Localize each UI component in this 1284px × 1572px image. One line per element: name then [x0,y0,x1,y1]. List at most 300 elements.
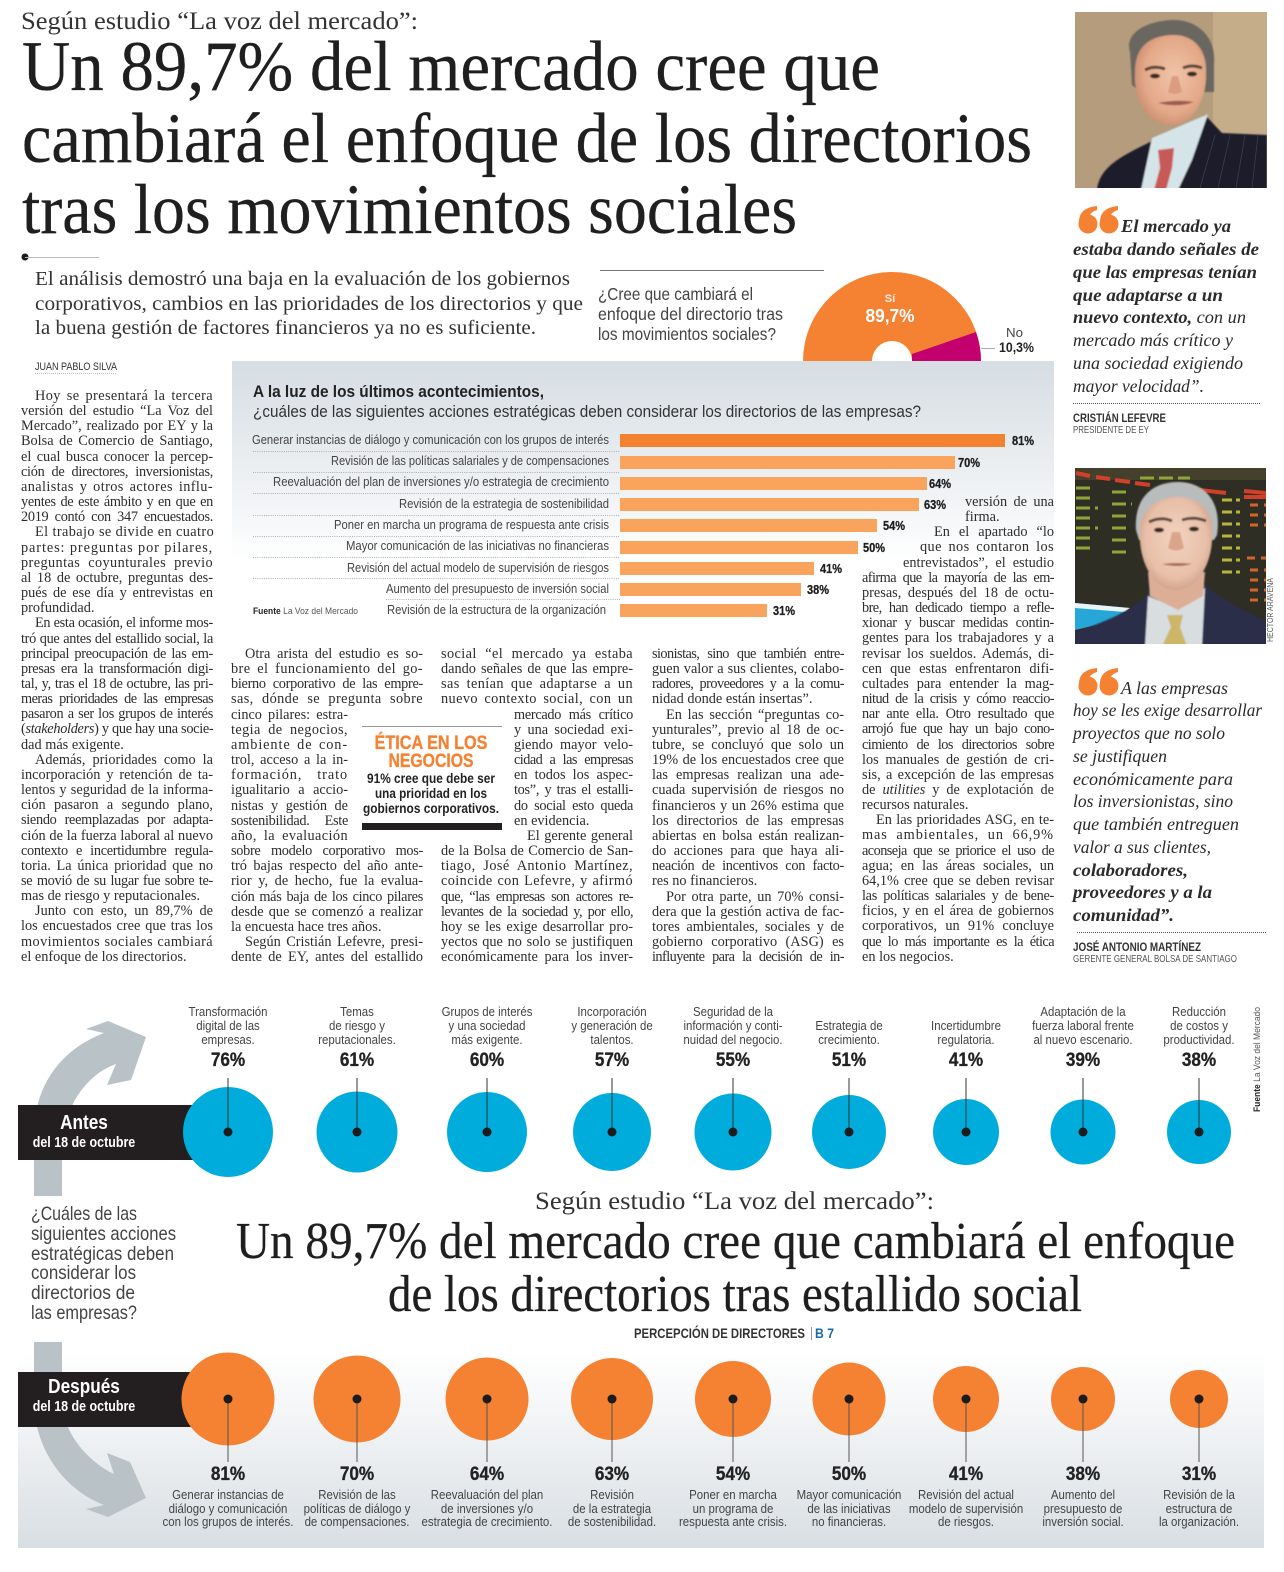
quote attribution [1073,412,1166,436]
after item 38%: inversión social. [1042,1514,1124,1529]
after item 50%: 50% [832,1462,866,1484]
article column 5: agua; en las áreas sociales, un [862,858,1054,874]
article column 1: Bolsa de Comercio de Santiago, [21,433,213,449]
quote text: mayor velocidad”. [1073,376,1204,396]
article column 2: trol, acceso a la in- [231,752,348,768]
ethics callout box: NEGOCIOS [388,751,474,772]
before item 51%: crecimiento. [818,1032,880,1047]
article column 2: formación, trato [231,767,348,783]
article column 1: pasaron a ser los grupos de interés [21,706,213,722]
before item 61%: 61% [340,1048,374,1070]
main headline [22,28,1032,249]
chart values: 31% [773,604,795,618]
before item 38% [1163,1004,1235,1164]
chart values: 54% [883,519,905,533]
article column 5: cimiento de los directorios sobre [862,736,1054,752]
teaser headline [236,1188,1235,1323]
article column 2: tegia de negocios, [231,722,348,738]
article column 3: dando señales de que las empre- [441,661,633,677]
poll half donut chart: Sí [885,293,896,305]
label: after: del 18 de octubre [33,1398,136,1414]
poll question: enfoque del directorio tras [598,304,783,324]
quote text: proyectos que no solo [1071,723,1225,743]
quote text [1071,678,1263,925]
article column 1: pués de ese día y entrevistas en [21,585,213,601]
article column 5: gentes para los trabajadores y a [862,630,1054,646]
before item 41%: regulatoria. [937,1032,995,1047]
article column 2: cinco pilares: estra- [231,707,348,723]
after item 50%: Mayor comunicación [797,1487,902,1502]
article column 1: el enfoque de los directorios. [21,949,187,965]
article column 5: los manuales de gestión de cri- [862,752,1054,768]
after: row of orange circles [163,1352,1239,1529]
after item 31%: estructura de [1166,1501,1233,1516]
quote text: nuevo contexto, con un [1073,307,1246,327]
article column 4: financieros y un 26% estima que [652,798,844,814]
article column 1: mas de riesgo y reputacionales. [21,888,200,904]
after item 70% [304,1356,411,1529]
chart heading [253,382,921,421]
quote text: colaboradores, [1073,860,1188,880]
before item 55%: 55% [716,1048,750,1070]
chart values: 64% [929,477,951,491]
article column 5: nitud de la crisis y cómo reaccio- [862,691,1054,707]
before item 39%: al nuevo escenario. [1033,1032,1133,1047]
label: before: del 18 de octubre [33,1134,136,1150]
article column 2: bierno corporativo de las empre- [231,676,423,692]
label: after: Después [48,1375,120,1397]
article column 1: movimientos sociales cambiará [21,934,213,950]
quote attribution: PRESIDENTE DE EY [1073,424,1149,436]
article column 2: nistas y gestión de [231,798,348,814]
article column 2: sas, dónde se pregunta sobre [231,691,423,707]
article column 3: mercado más crítico [514,707,633,723]
article column 2: desde que se comenzó a realizar [231,904,423,920]
after item 81% [163,1352,293,1529]
after item 64%: 64% [470,1462,504,1484]
article column 1: contexto e incertidumbre regula- [21,843,213,859]
before item 61%: Temas [340,1004,374,1019]
article column 1: el cual busca conocer la percep- [21,449,213,465]
article column 1: El trabajo se divide en cuatro [35,524,214,540]
ethics callout box: 91% cree que debe ser [367,771,496,786]
before item 60%: 60% [470,1048,504,1070]
intro text: la buena gestión de factores financieros ya no es suficiente. [35,317,536,339]
after item 54% [679,1361,787,1529]
quote 2 [1071,668,1266,965]
article column 4: nidad donde están insertas”. [652,691,812,707]
question: considerar los [31,1262,136,1284]
poll half donut chart: 89,7% [866,306,914,326]
before item 51%: 51% [832,1048,866,1070]
article column 5: aconseja que se priorice el uso de [862,843,1054,859]
chart heading: A la luz de los últimos acontecimientos, [253,382,544,401]
article column 4: gobierno corporativo (ASG) es [652,934,844,950]
article column 5: recursos naturales. [862,797,968,813]
quote text: una sociedad exigiendo [1073,353,1243,373]
article column 3: social “el mercado ya estaba [441,646,633,662]
chart bars [620,434,1005,617]
article column 2: rior y, de hecho, fue la evalua- [231,873,423,889]
article column 4: los directorios de las empresas [652,813,844,829]
poll question: los movimientos sociales? [598,324,776,344]
quote text: valor a sus clientes, [1073,837,1211,857]
article column 5: xionar y buscar medidas contin- [862,615,1054,631]
after item 38%: Aumento del [1051,1487,1115,1502]
after item 50%: de las iniciativas [807,1501,891,1516]
article column 4: las empresas realizan una ade- [652,767,844,783]
article column 2: sostenibilidad. Este [231,813,348,829]
article column 5: que lo más importante es la ética [862,934,1054,950]
after item 41%: Revisión del actual [918,1487,1014,1502]
article column 2: la encuesta hace tres años. [231,919,381,935]
before item 51%: Estrategia de [815,1018,883,1033]
article column 1: tró que antes del estallido social, la [21,630,213,646]
main headline: cambiará el enfoque de los directorios [22,100,1032,178]
article column 1: los encuestados cree que tras los [21,918,213,934]
before item 55%: información y conti- [683,1018,783,1033]
article column 1: meras prioridades de las empresas [21,691,213,707]
quote text: hoy se les exige desarrollar [1073,700,1263,720]
article column 1: Además, prioridades como la [35,752,213,768]
panel: strategic actions bar chart [232,361,1054,643]
after item 63%: de la estrategia [573,1501,651,1516]
chart heading: ¿cuáles de las siguientes acciones estratégicas deben considerar los directorios de las empresas? [253,402,921,421]
after item 70%: políticas de diálogo y [304,1501,411,1516]
article column 1: ción de la fuerza laboral al nuevo [21,828,213,844]
before source: Fuente La Voz del Mercado [1252,1007,1262,1112]
quote text: estaba dando señales de [1073,239,1259,259]
article column 5: bre, han dedicado tiempo a refle- [862,600,1054,616]
question: directorios de [31,1282,135,1304]
article column 1: analistas y otros actores influ- [21,479,213,495]
article column 4: tores ambientales, sociales y de [652,919,844,935]
before item 57%: Incorporación [577,1004,647,1019]
after item 70%: de compensaciones. [305,1514,409,1529]
after item 54%: Poner en marcha [689,1487,777,1502]
after item 31%: 31% [1182,1462,1216,1484]
photo credit: HECTOR ARAVENA [1266,577,1275,642]
label: before [18,1105,193,1160]
before item 55%: Seguridad de la [693,1004,773,1019]
after item 50%: no financieras. [812,1514,886,1529]
ethics callout box: gobiernos corporativos. [363,801,499,816]
after item 38%: presupuesto de [1044,1501,1123,1516]
before item 76%: 76% [211,1048,245,1070]
article column 1: presas era la transformación digi- [21,661,213,677]
article column 5: sis, a excepción de las empresas [862,767,1054,783]
article column 1: preguntas coyunturales previo [21,555,213,571]
quote attribution: GERENTE GENERAL BOLSA DE SANTIAGO [1073,953,1237,965]
article column 4: guen valor a sus clientes, colabo- [652,661,844,677]
article column 2: año, la evaluación [231,828,348,844]
ethics callout box [362,726,502,830]
quote text: se justifiquen [1073,746,1167,766]
before item 76%: digital de las [196,1018,260,1033]
quote 1 [1073,206,1260,436]
article column 1: Junto con esto, un 89,7% de [35,903,213,919]
article column 4: 19% de los encuestados cree que [652,752,844,768]
photo: Cristián Lefevre [1075,12,1267,190]
quote text: que las empresas tenían [1073,262,1257,282]
byline: JUAN PABLO SILVA [35,361,118,373]
article column 3: do social esto queda [514,798,633,814]
article column 5: corporativos, un 91% concluye [862,918,1054,934]
quote text: mercado más crítico y [1073,330,1233,350]
main headline: Un 89,7% del mercado cree que [22,28,880,106]
teaser headline: Según estudio “La voz del mercado”: [535,1188,934,1215]
article column 4: sionistas, sino que también entre- [652,646,844,662]
chart values: 41% [820,562,842,576]
before item 76%: empresas. [201,1032,255,1047]
article column 3: yectos que no solo se justifiquen [441,934,633,950]
quote text: comunidad”. [1073,905,1174,925]
after item 63%: de sostenibilidad. [568,1514,656,1529]
before: row of blue circles [183,1004,1235,1177]
chart row labels: Generar instancias de diálogo y comunicación con los grupos de interés [252,432,609,447]
chart values: 50% [863,541,885,555]
before item 51% [812,1018,886,1169]
photo: José Antonio Martínez [1075,468,1266,646]
question: ¿Cuáles de las [31,1203,137,1225]
article column 5: 64,1% cree que se deben revisar [862,873,1054,889]
article column 1: yentes de este ámbito y en que en [21,494,213,510]
before item 39%: fuerza laboral frente [1032,1018,1134,1033]
chart row labels: Poner en marcha un programa de respuesta ante crisis [334,517,609,532]
article column 1: profundidad. [21,600,94,616]
arrow: before [34,1021,146,1196]
poll question: ¿Cree que cambiará el [598,284,753,304]
main headline: tras los movimientos sociales [22,171,797,249]
icon: orange quotation mark [1078,206,1118,234]
article column 4: yunturales”, previo al 18 de oc- [652,722,844,738]
article column 1: 2019 contó con 347 encuestados. [21,509,213,525]
article column 5: ficios, y en el área de gobiernos [862,903,1054,919]
article column 1: dad más exigente. [21,737,124,753]
before item 39%: 39% [1066,1048,1100,1070]
article column 3: que, “las empresas son actores re- [441,888,633,904]
article column 1: se movió de su lugar fue sobre te- [21,873,213,889]
poll half donut chart: No [1006,325,1023,340]
arrow: after [34,1342,146,1517]
after item 38% [1042,1367,1124,1529]
before item 57% [571,1004,653,1171]
article column 4: do acciones para que haya ali- [652,843,844,859]
article column 1: ción de directores, inversionistas, [21,464,213,480]
article column 2: bre el funcionamiento del go- [231,661,423,677]
chart values: 63% [924,498,946,512]
ethics callout box: ÉTICA EN LOS [374,732,488,754]
article column 2: Según Cristián Lefevre, presi- [245,934,423,950]
article column 1: En esta ocasión, el informe mos- [35,615,213,631]
article column 1: al 18 de octubre, preguntas des- [21,570,213,586]
article column 2: ambiente de con- [231,737,348,753]
article column 5: en los negocios. [862,949,954,965]
before item 41%: 41% [949,1048,983,1070]
after item 41%: modelo de supervisión [909,1501,1023,1516]
chart row labels: Revisión de las políticas salariales y de compensaciones [331,453,609,468]
after item 64% [422,1358,552,1529]
article column 5: revisar los sueldos. Además, di- [862,646,1054,662]
quote text: que adaptarse a un [1073,285,1223,305]
chart values [773,434,1034,618]
question: estratégicas deben [31,1243,174,1265]
intro text: corporativos, cambios en las prioridades de los directorios y que [35,293,583,315]
article column 5: afirma que la mayoría de las em- [862,570,1054,586]
article column 5: firma. [965,509,1000,525]
article column 1: principal preocupación de las em- [21,646,213,662]
after item 81%: 81% [211,1462,245,1484]
chart row labels [252,432,609,617]
after item 54%: un programa de [693,1501,774,1516]
quote text [1073,216,1259,396]
before item 38%: 38% [1182,1048,1216,1070]
after item 81%: Generar instancias de [172,1487,284,1502]
after item 31% [1159,1370,1239,1529]
before item 61% [316,1004,398,1172]
article column 3: hoy se les exige desarrollar pro- [441,919,633,935]
poll half donut chart: 10,3% [999,339,1034,355]
article column 3: económicamente para los inver- [441,949,633,965]
article column 3: nuevo contexto social, con un [441,691,633,707]
article column 2: dente de EY, antes del estallido [231,949,423,965]
article column 4: neación de incentivos con facto- [652,858,844,874]
chart row labels: Mayor comunicación de las iniciativas no financieras [346,538,609,553]
article column 3: en todos los aspec- [514,767,633,783]
article column 4: influyente para la decisión de in- [652,949,844,965]
after item 64%: de inversiones y/o [441,1501,533,1516]
panel: after background [18,1352,1264,1548]
before item 61%: de riesgo y [329,1018,386,1033]
quote text: A las empresas [1120,678,1228,698]
before item 41%: Incertidumbre [931,1018,1001,1033]
label: before: Antes [60,1111,108,1133]
quote attribution [1073,941,1237,965]
article column 3: giendo mayor velo- [514,737,633,753]
after item 54%: respuesta ante crisis. [679,1514,787,1529]
article column 3: en evidencia. [514,813,589,829]
article column 3: coincide con Lefevre, y afirmó [441,873,633,889]
article column 1: toria. La única prioridad que no [21,858,213,874]
before item 38%: productividad. [1163,1032,1235,1047]
before item 57%: 57% [595,1048,629,1070]
before item 60%: Grupos de interés [442,1004,532,1019]
article column 3: sas tenían que adaptarse a un [441,676,633,692]
after item 63%: Revisión [590,1487,634,1502]
quote text: económicamente para [1073,769,1233,789]
quote text: que también entreguen [1073,814,1239,834]
question: siguientes acciones [31,1223,176,1245]
article column 5: presas, después del 18 de octu- [862,585,1054,601]
article column 5: mas ambientales, un 66,9% [862,827,1054,843]
article column 5: cen que estas enfrentaron difi- [862,661,1054,677]
before item 76%: Transformación [189,1004,268,1019]
article column 1: tal, y, tras el 18 de octubre, las pri- [21,676,213,692]
after item 81%: diálogo y comunicación [169,1501,288,1516]
article column 1: versión del estudio “La Voz del [21,403,213,419]
article column 1 [21,388,214,965]
article column 2: Otra arista del estudio es so- [245,646,423,662]
before item 60%: y una sociedad [449,1018,526,1033]
before item 76% [183,1004,273,1177]
after item 70%: 70% [340,1462,374,1484]
before item 61%: reputacionales. [318,1032,396,1047]
article column 4 [652,646,844,965]
quote text: proveedores y a la [1071,882,1212,902]
article column 1: ción pasaron a segundo plano, [21,797,213,813]
chart row labels: Aumento del presupuesto de inversión social [386,581,609,596]
after item 70%: Revisión de las [318,1487,396,1502]
chart row labels: Revisión de la estructura de la organización [387,602,606,617]
article column 5 [862,494,1054,965]
before item 39%: Adaptación de la [1040,1004,1126,1019]
article column 4: En las sección “preguntas co- [666,707,844,723]
article column 1: (stakeholders) y que hay una socie- [21,721,213,737]
chart values: 38% [807,583,829,597]
article column 3: levantes de la sociedad y, por ello, [441,904,633,920]
article column 1: siendo reemplazadas por adapta- [21,812,213,828]
article column 2: igualitario a accio- [231,782,348,798]
after item 31%: Revisión de la [1163,1487,1235,1502]
after item 81%: con los grupos de interés. [163,1514,293,1529]
question: las empresas? [31,1302,137,1324]
article column 2: ción más baja de los cinco pilares [231,888,423,904]
poll question [598,270,824,344]
after item 31%: la organización. [1159,1514,1239,1529]
intro text [35,268,583,339]
after item 38%: 38% [1066,1462,1100,1484]
article column 1: lentos y seguridad de la informa- [21,782,213,798]
after item 63%: 63% [595,1462,629,1484]
section reference: B 7 [815,1325,834,1341]
article column 2: sobre modelo corporativo mos- [231,843,423,859]
label: after [18,1372,193,1427]
article column 3: El gerente general [527,828,633,844]
after item 41% [909,1366,1023,1529]
article column 3 [441,646,634,965]
article column 4: radores, proveedores y a la comu- [652,676,844,692]
article column 5: arrojó fue que hay un bajo cono- [862,721,1054,737]
chart row labels: Revisión del actual modelo de supervisión de riesgos [347,560,609,575]
before item 41% [931,1018,1001,1165]
quote attribution: CRISTIÁN LEFEVRE [1073,412,1166,425]
article column 4: abiertas en bolsa están realizan- [652,828,844,844]
article column 5: de utilities y de explotación de [862,782,1054,798]
article column 4: cuada supervisión de riesgos no [652,782,844,798]
question [31,1203,176,1324]
after item 41%: 41% [949,1462,983,1484]
article column 4: dera que la gestión activa de fac- [652,904,844,920]
after item 64%: Reevaluación del plan [431,1487,543,1502]
chart source: Fuente La Voz del Mercado [253,606,358,617]
article column 4: res no financieros. [652,873,757,889]
article column 5: En las prioridades ASG, en te- [876,812,1054,828]
before item 39% [1032,1004,1134,1164]
quote text: los inversionistas, sino [1073,791,1233,811]
article column 3: tiago, José Antonio Martínez, [441,858,633,874]
article column 4: tubre, se concluyó que solo un [652,737,844,753]
before item 55%: nuidad del negocio. [683,1032,783,1047]
article column 4: Por otra parte, un 70% consi- [666,888,844,904]
after item 63% [568,1358,656,1529]
pretitle: Según estudio “La voz del mercado”: [21,8,418,35]
before item 57%: y generación de [571,1018,653,1033]
ethics callout box: una prioridad en los [375,786,487,801]
before item 38%: de costos y [1170,1018,1229,1033]
article column 5: las políticas salariales y de bene- [862,888,1054,904]
article column 2: tró bajas respecto del año ante- [231,858,423,874]
article column 2 [231,646,423,965]
